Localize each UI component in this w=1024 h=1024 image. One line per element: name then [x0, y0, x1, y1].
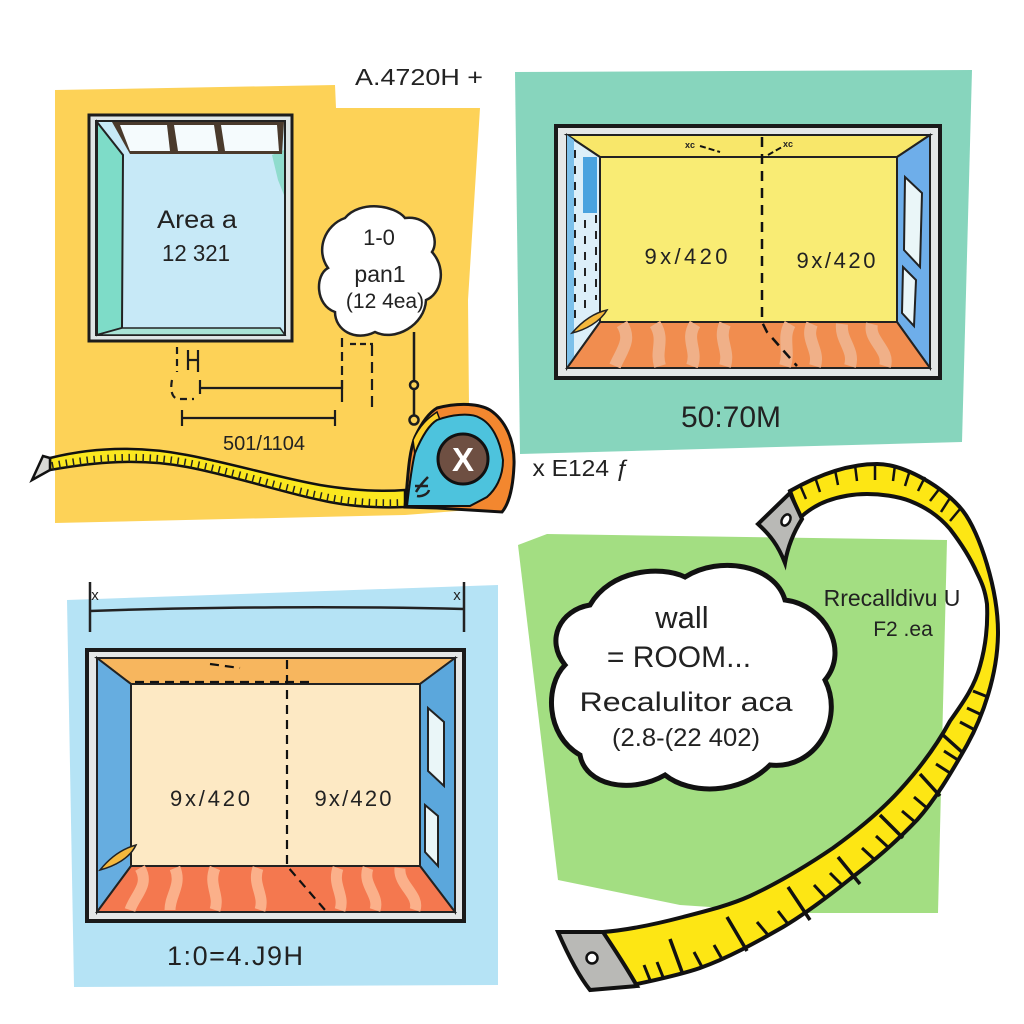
connector line	[410, 332, 418, 425]
room caption: 1:0=4.J9H	[167, 941, 303, 971]
dimension lines	[171, 338, 373, 426]
room caption: 50:70M	[681, 401, 781, 434]
thought bubble: small: (12 4ea)	[346, 290, 424, 313]
tape measure: large	[558, 464, 998, 990]
tape end hook: top	[758, 493, 802, 563]
room perspective: xc	[685, 140, 695, 150]
room perspective	[87, 650, 464, 921]
room top view	[89, 115, 292, 341]
thought bubble: wall: = ROOM...	[607, 641, 751, 674]
room perspective: 9x/420	[314, 786, 392, 811]
thought bubble: wall: wall	[654, 600, 709, 635]
room perspective	[556, 126, 940, 378]
width dimension: x	[453, 587, 461, 604]
tape case	[405, 404, 514, 512]
thought bubble: wall: (2.8-(22 402)	[612, 724, 760, 752]
panel: green callout	[518, 534, 960, 913]
thought bubble: small: pan1	[354, 261, 406, 287]
panel: green callout: F2 .ea	[873, 618, 933, 641]
width dimension: x	[91, 587, 99, 604]
header label: A.4720H +	[355, 64, 483, 90]
room perspective: 9x/420	[796, 248, 876, 273]
room top view: 12 321	[162, 240, 230, 266]
tape case: X	[452, 441, 474, 478]
room perspective: 9x/420	[170, 786, 250, 811]
thought bubble: wall: Recalulitor aca	[580, 687, 794, 717]
dimension label: 501/1104	[223, 433, 305, 455]
width dimension	[90, 582, 464, 632]
tape measure: small	[32, 404, 514, 512]
thought bubble: wall	[551, 565, 835, 789]
panel: blue room view	[67, 582, 498, 987]
room perspective: 9x/420	[644, 244, 728, 269]
room top view: Area a	[157, 206, 237, 234]
panel: teal room view	[515, 70, 972, 454]
thought bubble: small: 1-0	[363, 225, 395, 250]
note label: x E124 ƒ	[532, 455, 630, 481]
thought bubble: small	[319, 206, 441, 336]
panel: yellow room plan	[55, 85, 480, 523]
room perspective: xc	[783, 139, 793, 149]
panel text: Rrecalldivu U	[824, 585, 960, 611]
tape end hook: bottom	[558, 932, 637, 990]
